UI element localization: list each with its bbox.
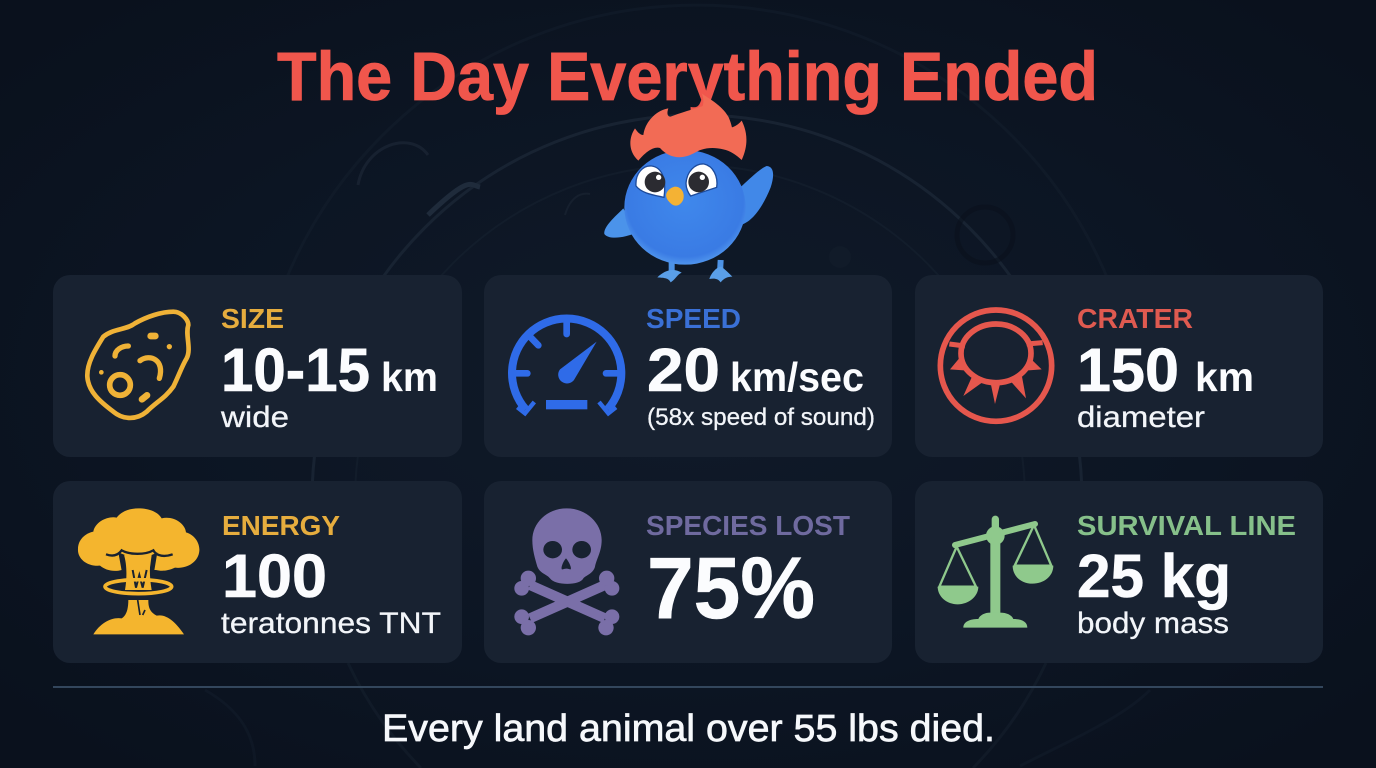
label: crater: CRATER	[1077, 303, 1193, 334]
label: species lost: SPECIES LOST	[646, 510, 850, 541]
label: energy: ENERGY	[222, 510, 340, 541]
note: speed of sound: (58x speed of sound)	[647, 404, 875, 431]
value: 10-15 km: 10-15	[221, 336, 370, 404]
value: 150 km: 150	[1077, 336, 1179, 404]
value: 100: 100	[222, 542, 327, 610]
panel: species lost	[484, 481, 892, 663]
panel: crater	[915, 275, 1323, 457]
note: body mass: body mass	[1077, 607, 1229, 640]
footer statement: Every land animal over 55 lbs died.	[382, 708, 995, 750]
icon: speedometer	[512, 319, 621, 413]
label: size: SIZE	[221, 303, 284, 334]
value: 75%: 75%	[647, 540, 815, 637]
panel: speed	[484, 275, 892, 457]
panel: size	[53, 275, 462, 457]
icon: mushroom cloud	[78, 508, 199, 634]
icon: crater	[940, 310, 1052, 421]
value: 150 km: km	[1195, 354, 1254, 400]
title: The Day Everything Ended	[277, 38, 1098, 115]
note: diameter: diameter	[1077, 401, 1205, 434]
icon: skull and crossbones	[514, 508, 619, 635]
panel: energy	[53, 481, 462, 663]
icon: balance scale	[938, 516, 1053, 628]
value: 150 km	[1077, 336, 1254, 404]
icon: asteroid	[87, 312, 189, 418]
panel: survival line	[915, 481, 1323, 663]
value: 25 kg: 25 kg	[1077, 542, 1231, 610]
value: 10-15 km: km	[381, 354, 438, 400]
label: survival line: SURVIVAL LINE	[1077, 510, 1296, 541]
value: 20 km/sec: km/sec	[730, 354, 864, 400]
note: wide: wide	[220, 401, 289, 434]
value: 20 km/sec	[647, 336, 864, 404]
mascot: blue bird with flame hair	[604, 93, 773, 282]
value: 20 km/sec: 20	[647, 336, 720, 404]
note: teratonnes TNT: teratonnes TNT	[221, 607, 441, 640]
label: speed: SPEED	[646, 303, 741, 334]
